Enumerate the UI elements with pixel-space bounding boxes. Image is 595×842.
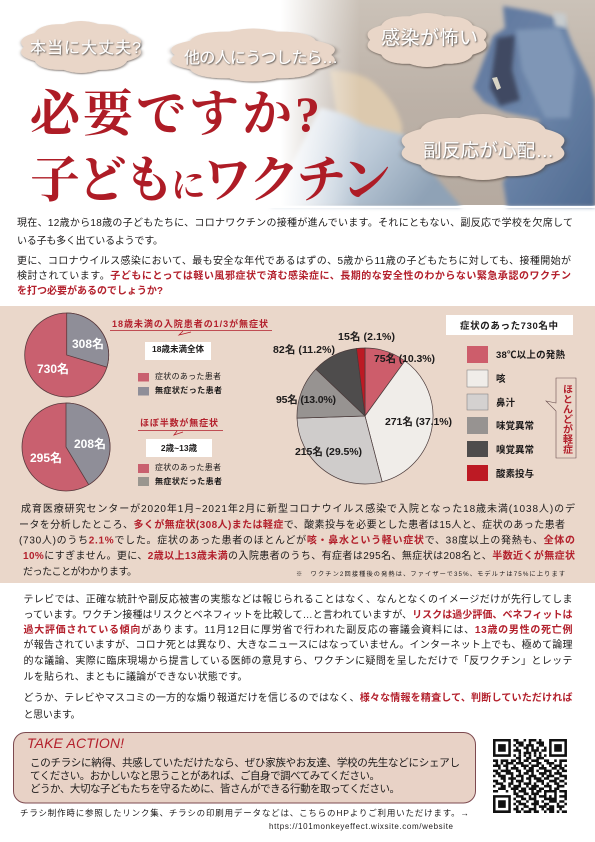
cloud: 感染が怖い: 感染が怖い: [381, 27, 478, 49]
main body text: と思います。: [24, 709, 80, 721]
heading: ほぼ半数が無症状: ほぼ半数が無症状: [140, 417, 218, 428]
callout: ほとんどが軽症: ほとんどが軽症: [560, 384, 572, 455]
pie labels: 75名 (10.3%): [374, 352, 435, 365]
main body text: [24, 592, 572, 721]
cloud: 本当に大丈夫?: [21, 21, 141, 73]
main body text: 的な議論、実際に臨床現場から提言している医師の意見すら、ワクチンに疑問を呈しただけで「反ワクチン」とレッテ: [24, 654, 572, 667]
legend: 2歳~13歳: 無症状だった患者: [155, 476, 222, 486]
label box: 2歳~13歳: 2歳~13歳: [161, 443, 198, 453]
label box: 18歳未満全体: 18歳未満全体: [152, 344, 204, 354]
title: 必要ですか?: [30, 86, 320, 142]
intro text: を打つ必要があるのでしょうか?: [17, 284, 163, 297]
legend: symptoms: 嗅覚異常: [496, 444, 534, 456]
legend: symptoms: 酸素投与: [496, 468, 535, 480]
data explanation text: (730人)のうち2.1%でした。症状のあった患者のほとんどが咳・鼻水という軽い症状で、38度以上の発熱も、全体の: [19, 534, 575, 546]
data explanation text: ータを分析したところ、多くが無症状(308人)または軽症で、酸素投与を必要とした患者は15人と、症状のあった患者: [19, 518, 565, 531]
legend: 2歳~13歳: [138, 462, 222, 486]
footnote: ※ ワクチン2回接種後の発熱は、ファイザーで35%、モデルナは75%に上ります: [296, 570, 565, 578]
title: [30, 86, 391, 208]
footer note and url: チラシ制作時に参照したリンク集、チラシの印刷用データなどは、こちらのHPよりご利用いただけます。→: [20, 808, 469, 818]
cloud: 副反応が心配…: 副反応が心配…: [423, 140, 554, 161]
data explanation text: 10%にすぎません。更に、2歳以上13歳未満の入院患者のうち、有症者は295名、無症状は208名と、半数近くが無症状: [23, 549, 575, 562]
intro text: いる子も多く出ているようです。: [17, 234, 163, 247]
QR code: [493, 740, 567, 812]
pie labels: 15名 (2.1%): [338, 330, 395, 343]
intro text: 検討されています。子どもにとっては軽い風邪症状で済む感染症に、長期的な安全性のわからない緊急承認のワクチン: [17, 269, 571, 282]
pie chart: 2歳~13歳: 295名: [30, 450, 62, 465]
pie labels: 215名 (29.5%): [295, 445, 362, 458]
label box: 18歳未満全体: [145, 342, 211, 360]
heading: 18歳未満の入院患者の1/3が無症状: 18歳未満の入院患者の1/3が無症状: [112, 318, 268, 329]
take action text: このチラシに納得、共感していただけたなら、ぜひ家族やお友達、学校の先生などにシェアし: [30, 756, 460, 769]
cloud: 本当に大丈夫?: 本当に大丈夫?: [30, 39, 141, 57]
main body text: っています。ワクチン接種はリスクとベネフィットを比較して…と言われていますが、リスクは過少評価、ベネフィットは: [24, 608, 572, 621]
cloud: 副反応が心配…: [402, 114, 564, 180]
take action text: [30, 756, 460, 795]
footer note and url: https://101monkeyeffect.wixsite.com/website: [269, 822, 454, 831]
intro text: 更に、コロナウイルス感染において、最も安全な年代であるはずの、5歳から11歳の子どもたちに対しても、接種開始が: [17, 254, 571, 267]
pie labels: 82名 (11.2%): [273, 343, 335, 356]
pie labels: [273, 330, 452, 458]
legend: 2歳~13歳: 症状のあった患者: [155, 462, 221, 472]
pie chart: 18歳未満全体: 308名: [72, 336, 104, 351]
footer note and url: [20, 808, 469, 831]
take action text: てください。おかしいなと思うことがあれば、ご自身で調べてみてください。: [30, 769, 380, 782]
main body text: 過大評価されている傾向があります。11月12日に厚労省で行われた副反応の審議会資料には、13歳の男性の死亡例: [24, 623, 572, 636]
legend: symptoms: [467, 346, 565, 481]
pie chart: 2歳~13歳: 208名: [74, 436, 106, 451]
data explanation text: [19, 502, 575, 578]
pie chart: 18歳未満全体: 730名: [37, 361, 69, 376]
main body text: テレビでは、正確な統計や副反応被害の実態などは報じられることはなく、なんとなくのイメージだけが先行してしま: [24, 592, 572, 606]
pie chart: 18歳未満全体: [25, 313, 109, 397]
legend: 18歳未満全体: [138, 371, 222, 396]
legend: symptoms: 味覚異常: [496, 420, 534, 432]
title: 子どもにワクチン: [30, 152, 391, 208]
data explanation text: だったことがわかります。: [23, 565, 137, 578]
cloud: 他の人にうつしたら…: [171, 29, 338, 82]
legend: symptoms: 38℃以上の発熱: [496, 349, 565, 361]
take action heading: TAKE ACTION!: [27, 735, 124, 751]
label box: 症状のあった730名中: 症状のあった730名中: [460, 320, 558, 332]
cloud: 他の人にうつしたら…: 他の人にうつしたら…: [184, 49, 338, 67]
legend: 18歳未満全体: 無症状だった患者: [155, 385, 222, 395]
main body text: が報告されていますが、コロナ死とは異なり、大きなニュースにはなっていません。インターネット上でも、極めて論理: [24, 638, 572, 651]
legend: 18歳未満全体: 症状のあった患者: [155, 371, 221, 381]
legend: symptoms: 咳: [496, 373, 506, 385]
heading: ほぼ半数が無症状: [138, 417, 223, 435]
header photo: arm and gloved hand with syringe: [0, 0, 595, 208]
pie chart: 2歳~13歳: [22, 403, 110, 491]
heading: 18歳未満の入院患者の1/3が無症状: [110, 318, 272, 335]
pie labels: 271名 (37.1%): [385, 415, 452, 428]
label box: 症状のあった730名中: [446, 315, 573, 335]
intro text: [17, 216, 573, 297]
main body text: どうか、テレビやマスコミの一方的な煽り報道だけを信じるのではなく、様々な情報を精査して、判断していただければ: [24, 691, 572, 704]
cloud: 感染が怖い: [368, 13, 486, 67]
main body text: ルを貼られ、まともに議論ができない状態です。: [24, 670, 248, 683]
panel: data background: [0, 306, 595, 583]
callout: ほとんどが軽症: [546, 378, 576, 458]
label box: 2歳~13歳: [146, 439, 212, 457]
pie labels: 95名 (13.0%): [276, 393, 336, 406]
data explanation text: 成育医療研究センターが2020年1月~2021年2月に新型コロナウイルス感染で入院となった18歳未満(1038人)のデ: [21, 502, 575, 515]
take action text: どうか、大切な子どもたちを守るために、皆さんができる行動を取ってください。: [30, 782, 400, 795]
intro text: 現在、12歳から18歳の子どもたちに、コロナワクチンの接種が進んでいます。それにともない、副反応で学校を欠席して: [17, 216, 573, 229]
pie chart: symptoms of 730 patients: [297, 348, 433, 484]
panel: take action: [14, 732, 476, 803]
legend: symptoms: 鼻汁: [496, 397, 516, 409]
